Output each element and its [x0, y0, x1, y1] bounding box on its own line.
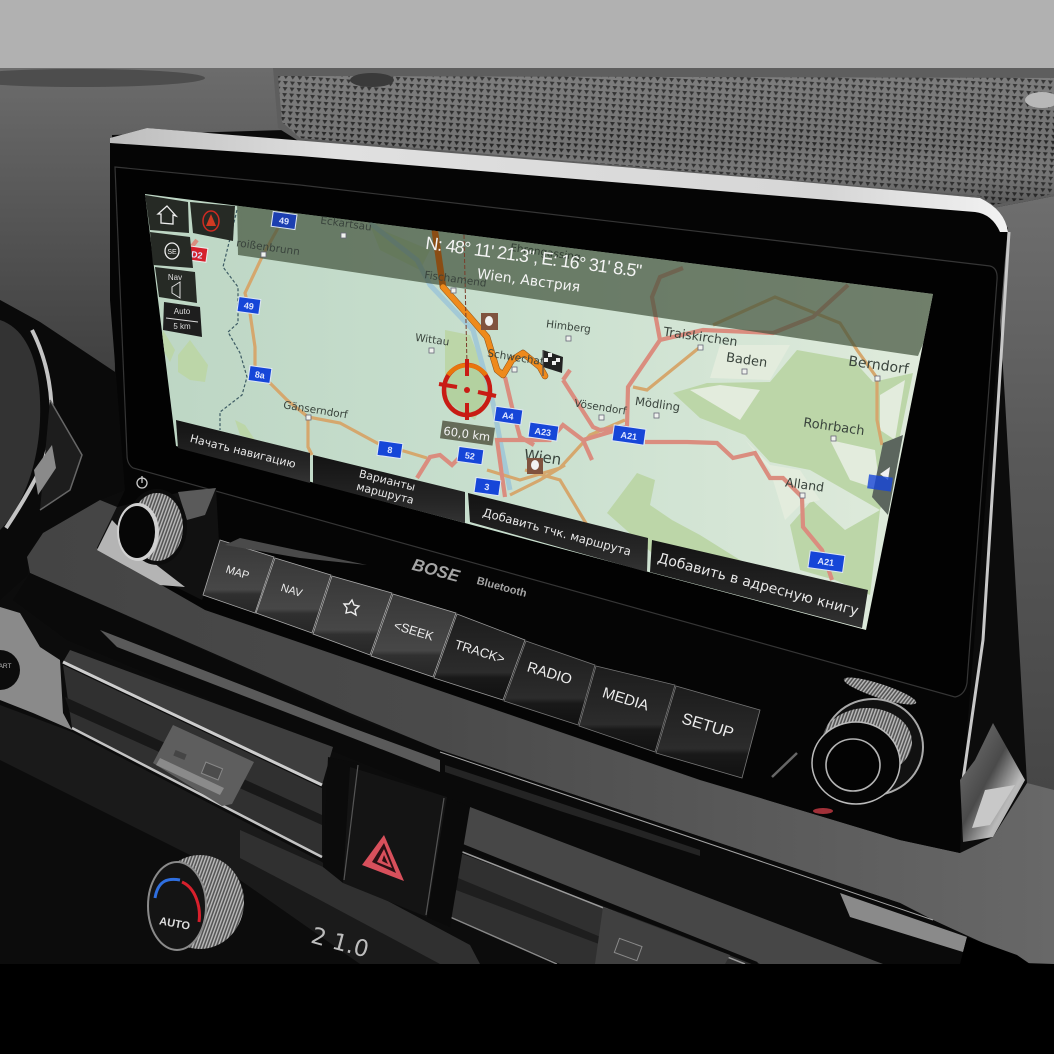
map side arrow	[867, 435, 903, 515]
highway shields: A21	[620, 430, 638, 442]
instrument cluster chrome	[0, 300, 115, 530]
climate temperature display: 2 1.0	[308, 923, 371, 963]
button: seek	[371, 594, 456, 677]
place names: Rohrbach	[802, 416, 865, 439]
icon: destination flag	[543, 350, 563, 376]
highway shields: D2	[190, 249, 203, 261]
banner location: Wien, Австрия	[476, 266, 581, 296]
icon: waypoint pin Wien	[527, 458, 543, 474]
hard buttons row	[203, 540, 760, 778]
banner coordinates: N: 48° 11' 21.3", E: 16° 31' 8.5"	[424, 233, 643, 281]
highway shields: 52	[464, 450, 476, 462]
screen glass	[115, 167, 997, 697]
button: setup	[656, 686, 760, 778]
orange route	[435, 232, 545, 376]
place names: roißenbrunn	[235, 237, 301, 258]
background top band	[0, 0, 1054, 68]
chrome rim	[110, 128, 1025, 842]
button: radio: RADIO	[525, 660, 574, 688]
button: MAP: MAP	[224, 564, 251, 582]
place names: Mödling	[634, 394, 681, 414]
highway shields: A23	[534, 426, 552, 438]
distance label: 60,0 km	[443, 424, 491, 444]
icon: waypoint pin upper	[481, 313, 498, 330]
crosshair target	[439, 359, 496, 420]
button: route options	[313, 455, 465, 523]
scale button	[163, 302, 202, 337]
button: add route point: Добавить тчк. маршрута	[481, 505, 633, 559]
scale button: Auto	[174, 307, 191, 316]
place names: Vösendorf	[573, 398, 627, 418]
tuner knob	[772, 673, 923, 814]
button: track: TRACK>	[453, 637, 507, 666]
place markers	[261, 233, 880, 498]
pale map patches	[690, 345, 905, 520]
lower grey strip	[240, 830, 480, 964]
place names: Eckartsau	[320, 215, 372, 234]
place names: Baden	[725, 350, 768, 371]
highway shields: A21	[817, 556, 835, 568]
highway shields: A4	[501, 410, 514, 422]
motorways	[180, 240, 848, 580]
map base	[145, 194, 933, 630]
place names: Ehrengassing	[509, 242, 581, 264]
highway shields: 49	[278, 215, 290, 227]
place names: Schwechat	[487, 347, 545, 368]
crosshair tick line	[464, 235, 467, 365]
lower dark trim	[0, 705, 480, 964]
place names: Gänserndorf	[282, 399, 349, 421]
right leather dash	[993, 196, 1054, 792]
display body	[97, 128, 1008, 853]
button: favourite star	[313, 576, 392, 655]
nav volume button	[155, 267, 197, 303]
voice button: SE	[167, 249, 177, 256]
place names: Fischamend	[424, 269, 487, 290]
hazard switch block	[323, 757, 470, 927]
highway shields: 3	[484, 482, 490, 492]
panel glare	[225, 538, 367, 565]
button: add to address book: Добавить в адресную книгу	[656, 550, 860, 620]
place names: Alland	[784, 474, 825, 495]
button: seek: <SEEK	[392, 618, 436, 644]
button: start navigation: Начать навигацию	[189, 432, 297, 471]
button: media	[579, 666, 675, 752]
button: start navigation	[176, 420, 310, 483]
place names: Wittau	[414, 332, 450, 349]
highway shields: 49	[243, 300, 255, 312]
voice button	[150, 232, 193, 268]
button: radio	[504, 641, 595, 725]
border line	[220, 210, 247, 430]
button: add route point	[468, 493, 648, 572]
navigation map screen	[145, 194, 945, 630]
place names: Berndorf	[847, 353, 911, 378]
bottom black band	[0, 964, 1054, 1054]
dash recess	[0, 69, 205, 87]
button: route options: Варианты	[358, 467, 417, 494]
button: track	[434, 614, 525, 700]
highway shields	[186, 211, 845, 572]
climate knob	[148, 855, 244, 950]
place names: Himberg	[545, 318, 592, 336]
home button	[145, 195, 189, 233]
danube river	[370, 223, 510, 490]
auto label: AUTO	[158, 915, 191, 933]
power icon	[137, 476, 147, 488]
black notch	[960, 937, 1030, 964]
Bluetooth label: Bluetooth	[475, 575, 528, 600]
vent tab	[153, 725, 254, 806]
dashboard top left	[0, 68, 285, 372]
place names: Traiskirchen	[662, 324, 738, 349]
volume knob	[97, 488, 220, 600]
button: media: MEDIA	[600, 684, 651, 715]
top info banner	[237, 200, 945, 356]
red scale	[182, 882, 199, 922]
start button ring	[0, 607, 72, 730]
button: MAP	[203, 540, 274, 613]
button: setup: SETUP	[680, 711, 736, 742]
soft grey band	[27, 500, 1054, 964]
nav volume button: Nav	[168, 273, 182, 282]
left air vent	[63, 650, 333, 857]
speaker grill	[273, 68, 1054, 208]
button: NAV: NAV	[279, 582, 304, 600]
highway shields: 8a	[254, 369, 266, 381]
place names	[235, 215, 911, 495]
glossy trim strip	[30, 573, 967, 952]
blue scale	[155, 879, 180, 898]
button: NAV	[256, 558, 331, 633]
scale button: 5 km	[173, 322, 191, 331]
highway shields: 8	[387, 445, 393, 455]
forest areas	[160, 225, 913, 595]
Bose logo: BOSE	[410, 555, 462, 586]
button: route options: маршрута	[355, 480, 415, 507]
secondary roads	[245, 228, 882, 545]
icon: hazard triangle	[362, 835, 404, 881]
compass button	[190, 202, 235, 241]
right air vent	[450, 807, 883, 964]
place names: Wien	[523, 446, 562, 469]
